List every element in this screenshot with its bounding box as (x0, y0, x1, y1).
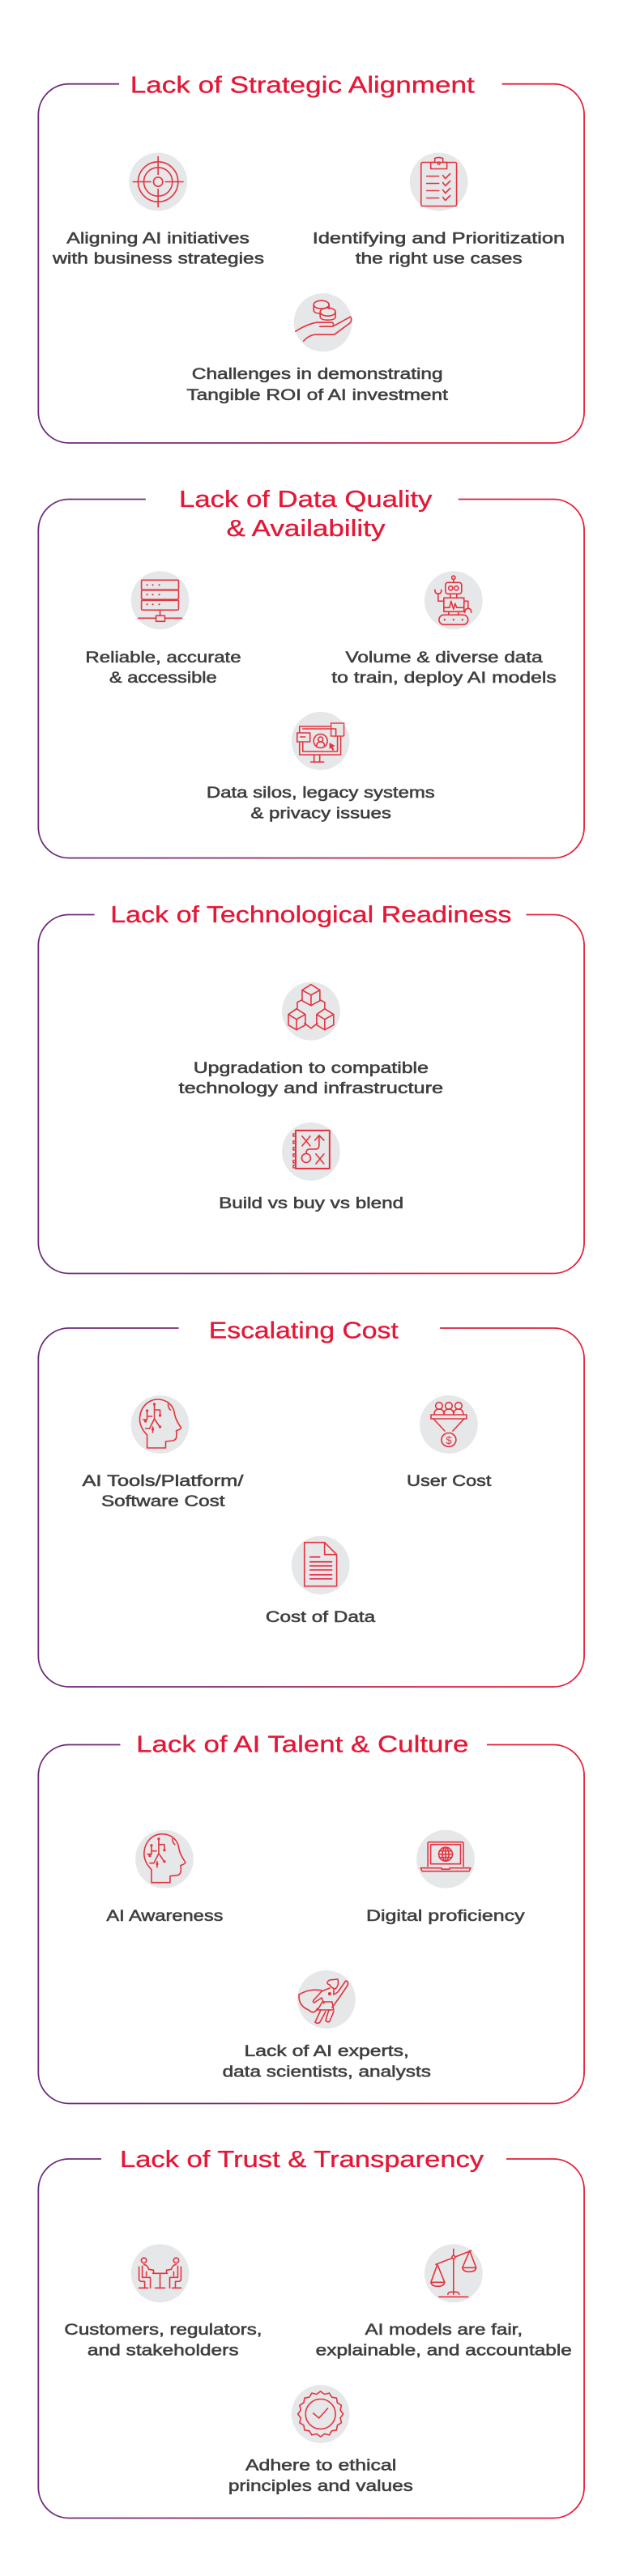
text: data silos: Data silos, legacy systems (207, 784, 435, 802)
panel: Lack of Strategic Alignment (38, 72, 584, 443)
text: reliable: Reliable, accurate (85, 649, 241, 666)
text: reliable (85, 649, 241, 687)
text: aligning: Aligning AI initiatives (66, 230, 250, 248)
text: adhere (228, 2457, 413, 2495)
heading (179, 487, 433, 542)
text: challenges: Tangible ROI of AI investment (186, 386, 449, 404)
text: upgradation: technology and infrastructure (179, 1079, 443, 1097)
heading: Lack of Strategic Alignment (130, 72, 475, 98)
text: build vs buy: Build vs buy vs blend (219, 1194, 403, 1212)
text: tools cost: AI Tools/Platform/ (82, 1472, 244, 1490)
icon: coins over hand (294, 293, 352, 351)
icon: AI head (131, 1395, 189, 1454)
panel: Lack of Technological Readiness (38, 902, 584, 1273)
icon: document (292, 1536, 350, 1595)
icon: users funnel: $ (446, 1434, 452, 1446)
panel border (38, 84, 584, 443)
heading: Escalating Cost (209, 1318, 399, 1343)
icon: robot (425, 571, 483, 629)
panel border (38, 1744, 584, 2104)
text: challenges: Challenges in demonstrating (192, 365, 443, 383)
text: digital proficiency: Digital proficiency (366, 1907, 525, 1925)
panel border (38, 1328, 584, 1687)
panel: Lack of AI Talent and Culture (38, 1731, 584, 2104)
text: volume: Volume & diverse data (345, 649, 543, 666)
icon: server (131, 571, 189, 629)
text: fair models: AI models are fair, (365, 2321, 523, 2339)
panel border (38, 2159, 584, 2519)
text: fair models (316, 2321, 572, 2360)
panel: Lack of Data Quality and Availability (38, 487, 584, 858)
text: aligning (52, 230, 264, 268)
text: volume (331, 649, 557, 687)
icon: AI head (135, 1830, 194, 1888)
text: adhere: principles and values (228, 2477, 413, 2495)
text: identifying: the right use cases (356, 250, 523, 268)
panel: Escalating Cost (38, 1318, 584, 1687)
text: fair models: explainable, and accountable (316, 2342, 572, 2360)
panel: Lack of Trust and Transparency (38, 2147, 584, 2519)
icon: seal with check (292, 2385, 350, 2443)
icon: laptop globe (416, 1830, 475, 1888)
icon: superhero (297, 1970, 356, 2029)
text: data silos: & privacy issues (250, 805, 391, 823)
text: lack of experts (223, 2042, 431, 2081)
icon: clipboard checklist (410, 152, 468, 211)
icon: strategy notebook (282, 1122, 340, 1181)
heading: Lack of Technological Readiness (110, 902, 511, 928)
icon: users funnel (420, 1395, 478, 1454)
heading: Lack of AI Talent & Culture (136, 1731, 468, 1757)
text: customers (64, 2321, 262, 2360)
text: identifying (313, 230, 565, 268)
text: tools cost: Software Cost (101, 1492, 225, 1510)
text: adhere: Adhere to ethical (245, 2457, 396, 2475)
text: lack of experts: Lack of AI experts, (244, 2042, 409, 2060)
text: lack of experts: data scientists, analysts (223, 2063, 431, 2081)
text: challenges (186, 365, 449, 404)
icon: connected cubes (282, 982, 340, 1041)
heading: Lack of Trust & Transparency (120, 2147, 484, 2173)
text: AI awareness: AI Awareness (106, 1907, 224, 1925)
text: customers: and stakeholders (87, 2342, 239, 2360)
text: reliable: & accessible (109, 669, 217, 687)
text: customers: Customers, regulators, (64, 2321, 262, 2339)
panel border (38, 499, 584, 858)
icon: monitor and data silos (292, 712, 350, 770)
text: upgradation: Upgradation to compatible (194, 1059, 429, 1077)
text: upgradation (179, 1059, 443, 1097)
text: tools cost (82, 1472, 244, 1510)
panel border (38, 915, 584, 1273)
heading: Lack of Data Quality (179, 487, 433, 513)
text: identifying: Identifying and Prioritization (313, 230, 565, 248)
text: user cost: User Cost (407, 1472, 492, 1490)
heading: & Availability (226, 516, 386, 542)
text: aligning: with business strategies (52, 250, 264, 268)
icon: meeting at table (131, 2244, 189, 2302)
text: cost of data: Cost of Data (266, 1608, 375, 1626)
text: volume: to train, deploy AI models (331, 669, 557, 687)
icon: target (129, 152, 187, 211)
text: data silos (207, 784, 435, 823)
icon: scales (425, 2244, 483, 2302)
